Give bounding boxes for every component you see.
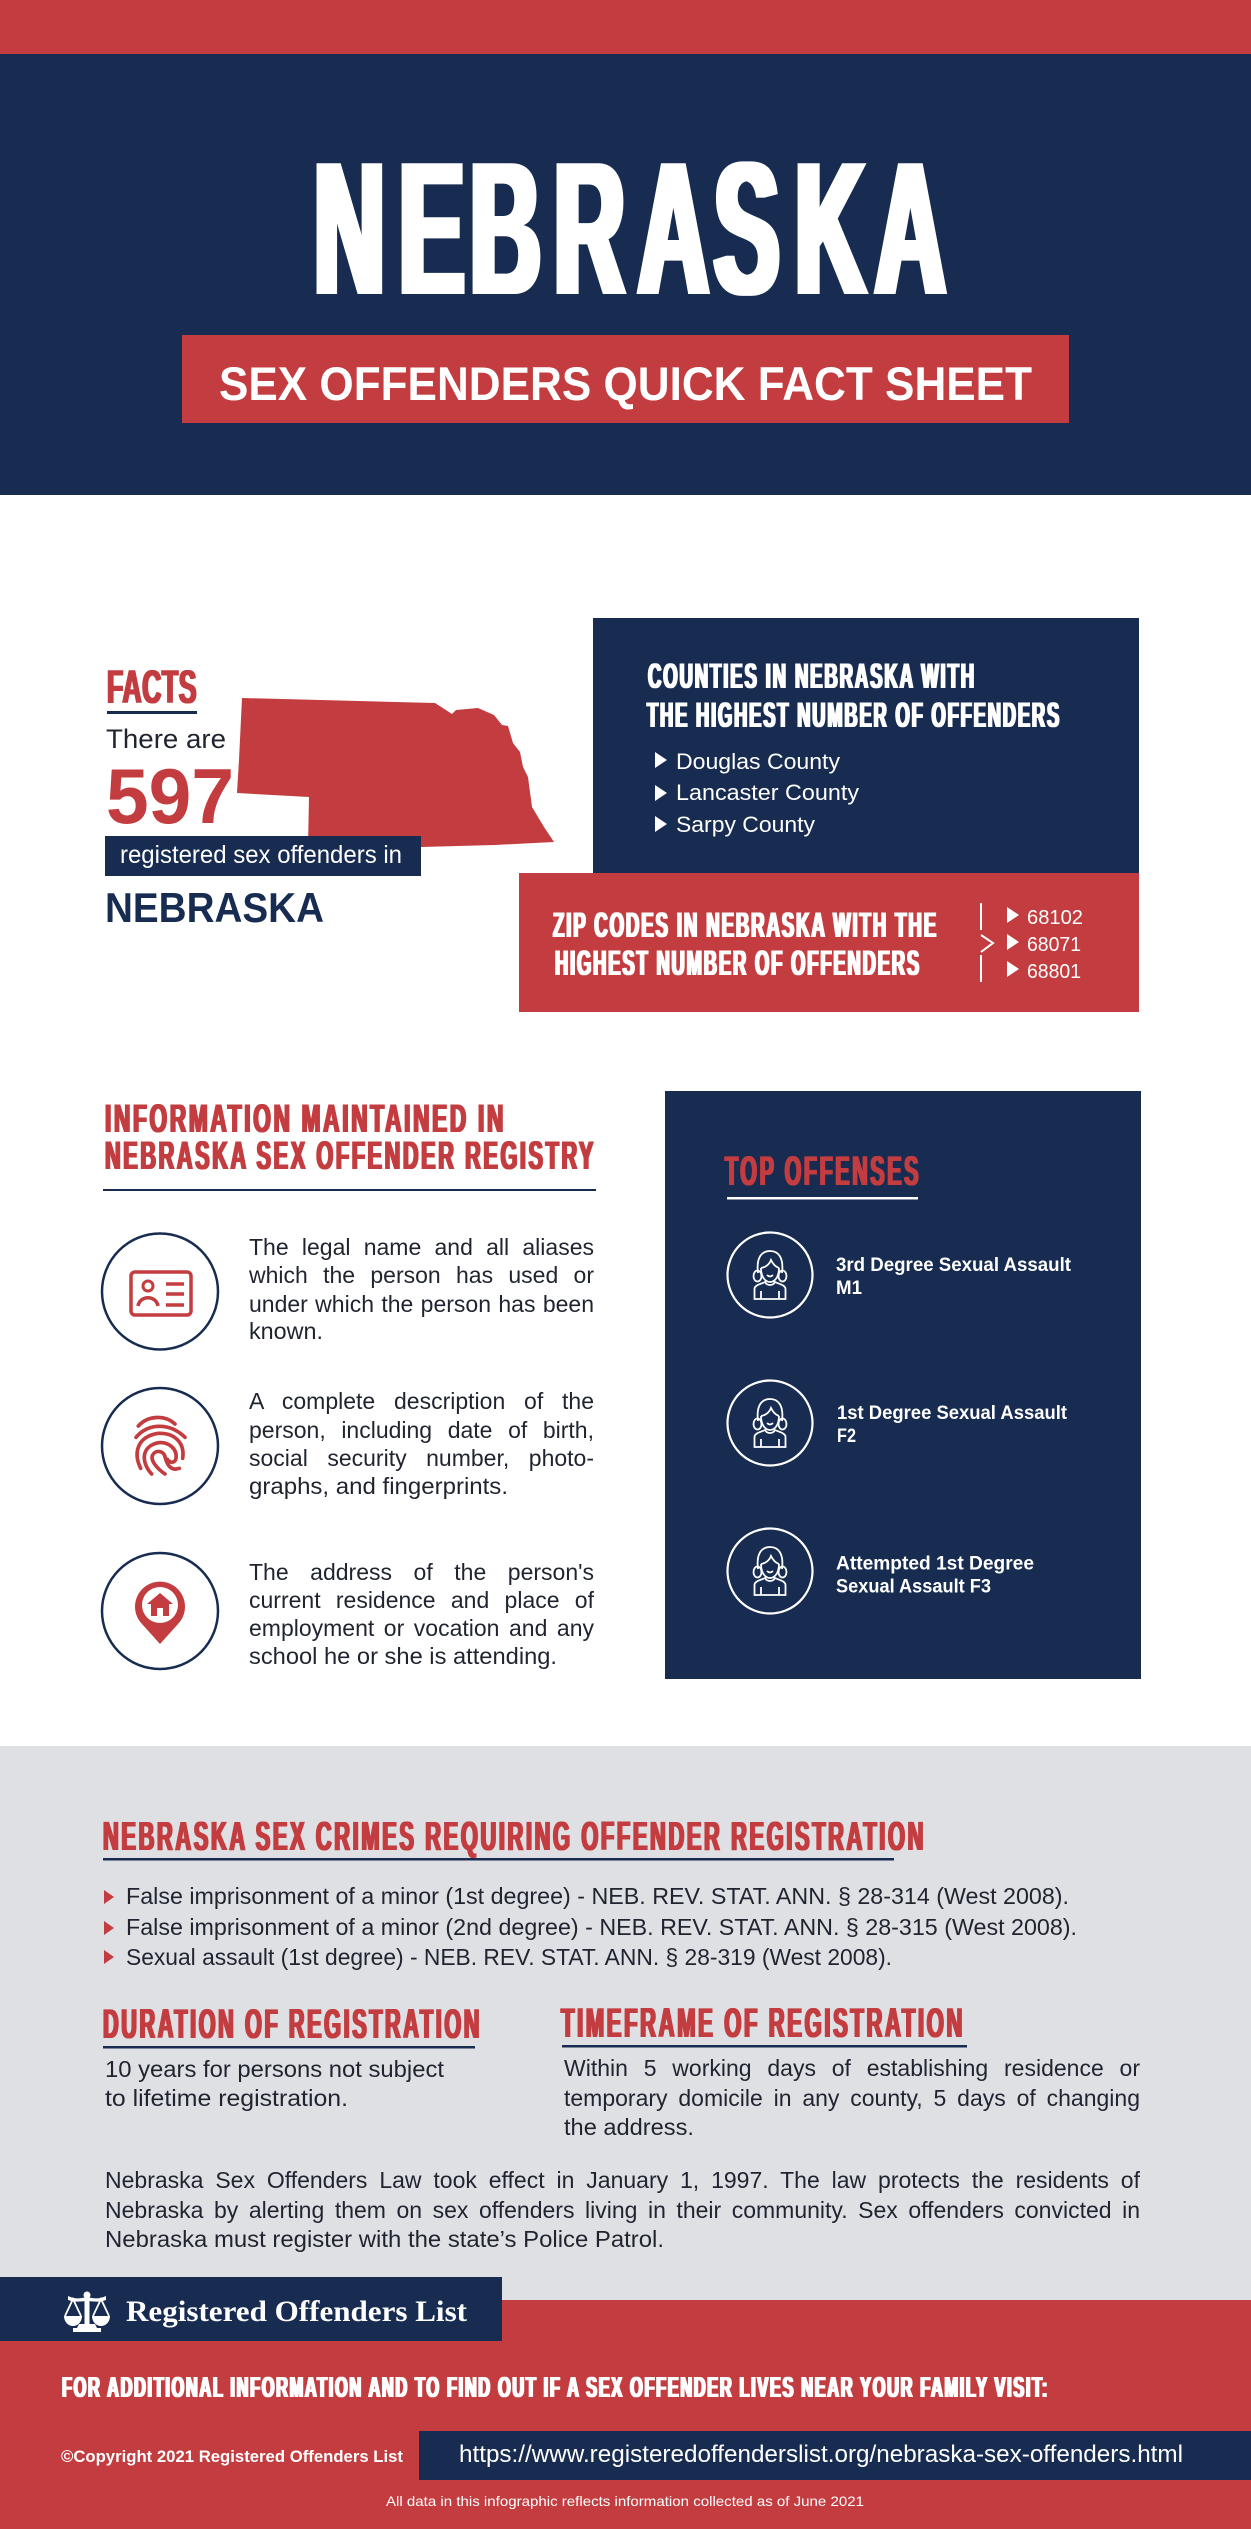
icon: girl [728,1528,812,1614]
text: legal name: known. [249,1318,323,1344]
logo [0,2277,502,2341]
panel: top counties [593,618,1139,873]
subtitle ribbon: SEX OFFENDERS QUICK FACT SHEET [219,357,1032,410]
copyright: ©Copyright 2021 Registered Offenders List [61,2447,403,2466]
zip list [1007,907,1083,983]
text: legal name: which the person has used or [249,1262,594,1288]
logo: Registered Offenders List [126,2295,467,2328]
offense 2: F2 [837,1425,856,1447]
url strip [419,2431,1251,2480]
info heading [103,1097,596,1191]
counties list: Lancaster County [676,780,859,805]
panel: footer [0,2277,1251,2529]
text: address: school he or she is attending. [249,1643,557,1669]
offenses heading: TOP OFFENSES [725,1147,921,1194]
label strip: registered sex offenders in [120,841,402,869]
crimes list: False imprisonment of a minor (2nd degree) - NEB. REV. STAT. ANN. § 28-315 (West 2008). [126,1914,1077,1940]
panel: sex crimes and registration [0,1746,1251,2300]
zip list: 68071 [1027,934,1081,956]
offense 1: 3rd Degree Sexual Assault [836,1254,1071,1276]
facts heading [107,660,197,714]
duration: DURATION OF REGISTRATION [103,2000,482,2047]
data note: All data in this infographic reflects information collected as of June 2021 [386,2493,864,2509]
state name: NEBRASKA [105,884,324,931]
timeframe: temporary domicile in any county, 5 days of changing [564,2085,1140,2111]
crimes list: Sexual assault (1st degree) - NEB. REV. STAT. ANN. § 28-319 (West 2008). [126,1944,892,1970]
title: NEBRASKA [314,123,946,335]
offense 1: M1 [836,1277,862,1299]
duration: 10 years for persons not subject [105,2056,445,2082]
law summary: Nebraska Sex Offenders Law took effect in January 1, 1997. The law protects the residents of [105,2167,1140,2193]
offense 2 [728,1380,1067,1466]
counties list: Sarpy County [676,812,815,837]
brace [981,903,993,982]
text: address [249,1557,594,1669]
icon: home pin [102,1553,218,1669]
text: legal name [249,1232,594,1344]
info heading: INFORMATION MAINTAINED IN [105,1097,506,1141]
offense 2: 1st Degree Sexual Assault [837,1402,1067,1424]
text: legal name: under which the person has been [249,1291,594,1317]
duration: to lifetime registration. [105,2085,348,2111]
law summary: Nebraska must register with the state’s Police Patrol. [105,2226,664,2252]
text: address: The address of the person's [249,1559,594,1585]
url strip: https://www.registeredoffenderslist.org/nebraska-sex-offenders.html [459,2441,1183,2468]
text: description: person, including date of birth, [249,1417,594,1443]
timeframe: Within 5 working days of establishing residence or [564,2055,1140,2081]
facts heading: FACTS [107,660,197,713]
counties heading [647,657,1061,735]
panel: facts [105,660,421,931]
crimes list [104,1883,1077,1970]
label strip [105,836,421,876]
text: description: social security number, photo- [249,1445,594,1471]
offense 3 [728,1528,1034,1614]
offense 1 [728,1232,1071,1318]
icon: girl [728,1380,812,1466]
counties heading: COUNTIES IN NEBRASKA WITH [648,657,976,696]
law summary [105,2165,1140,2252]
text: address: employment or vocation and any [249,1615,594,1641]
text: description: graphs, and fingerprints. [249,1473,508,1499]
zip heading: HIGHEST NUMBER OF OFFENDERS [555,944,921,983]
map: Nebraska state silhouette [237,698,554,847]
icon: girl [728,1232,812,1318]
icon: id card [102,1234,218,1350]
law summary: Nebraska by alerting them on sex offenders living in their community. Sex offenders convicted in [105,2197,1140,2223]
timeframe [561,1999,1140,2140]
icon: scales [64,2292,110,2332]
timeframe: the address. [564,2114,694,2140]
crimes list: False imprisonment of a minor (1st degree) - NEB. REV. STAT. ANN. § 28-314 (West 2008). [126,1883,1069,1909]
panel: top offenses [665,1091,1141,1679]
text: legal name: The legal name and all aliases [249,1234,594,1260]
zip list: 68801 [1027,961,1081,983]
panel: top zip codes [519,873,1139,1012]
there are: There are [106,724,226,754]
counties list [655,749,859,837]
offender count: 597 [106,752,234,840]
icon: fingerprint [102,1388,218,1504]
info heading: NEBRASKA SEX OFFENDER REGISTRY [105,1134,596,1178]
zip heading [553,906,938,983]
subtitle ribbon [182,335,1069,423]
zip list: 68102 [1027,907,1083,929]
text: description: A complete description of the [249,1388,594,1414]
text: address: current residence and place of [249,1587,594,1613]
counties list: Douglas County [676,749,840,774]
text: description [249,1386,594,1499]
offense 3: Sexual Assault F3 [836,1576,991,1598]
offense 3: Attempted 1st Degree [836,1552,1034,1574]
panel: information maintained [102,1097,596,1669]
header banner [0,0,1251,495]
duration [103,2000,482,2111]
